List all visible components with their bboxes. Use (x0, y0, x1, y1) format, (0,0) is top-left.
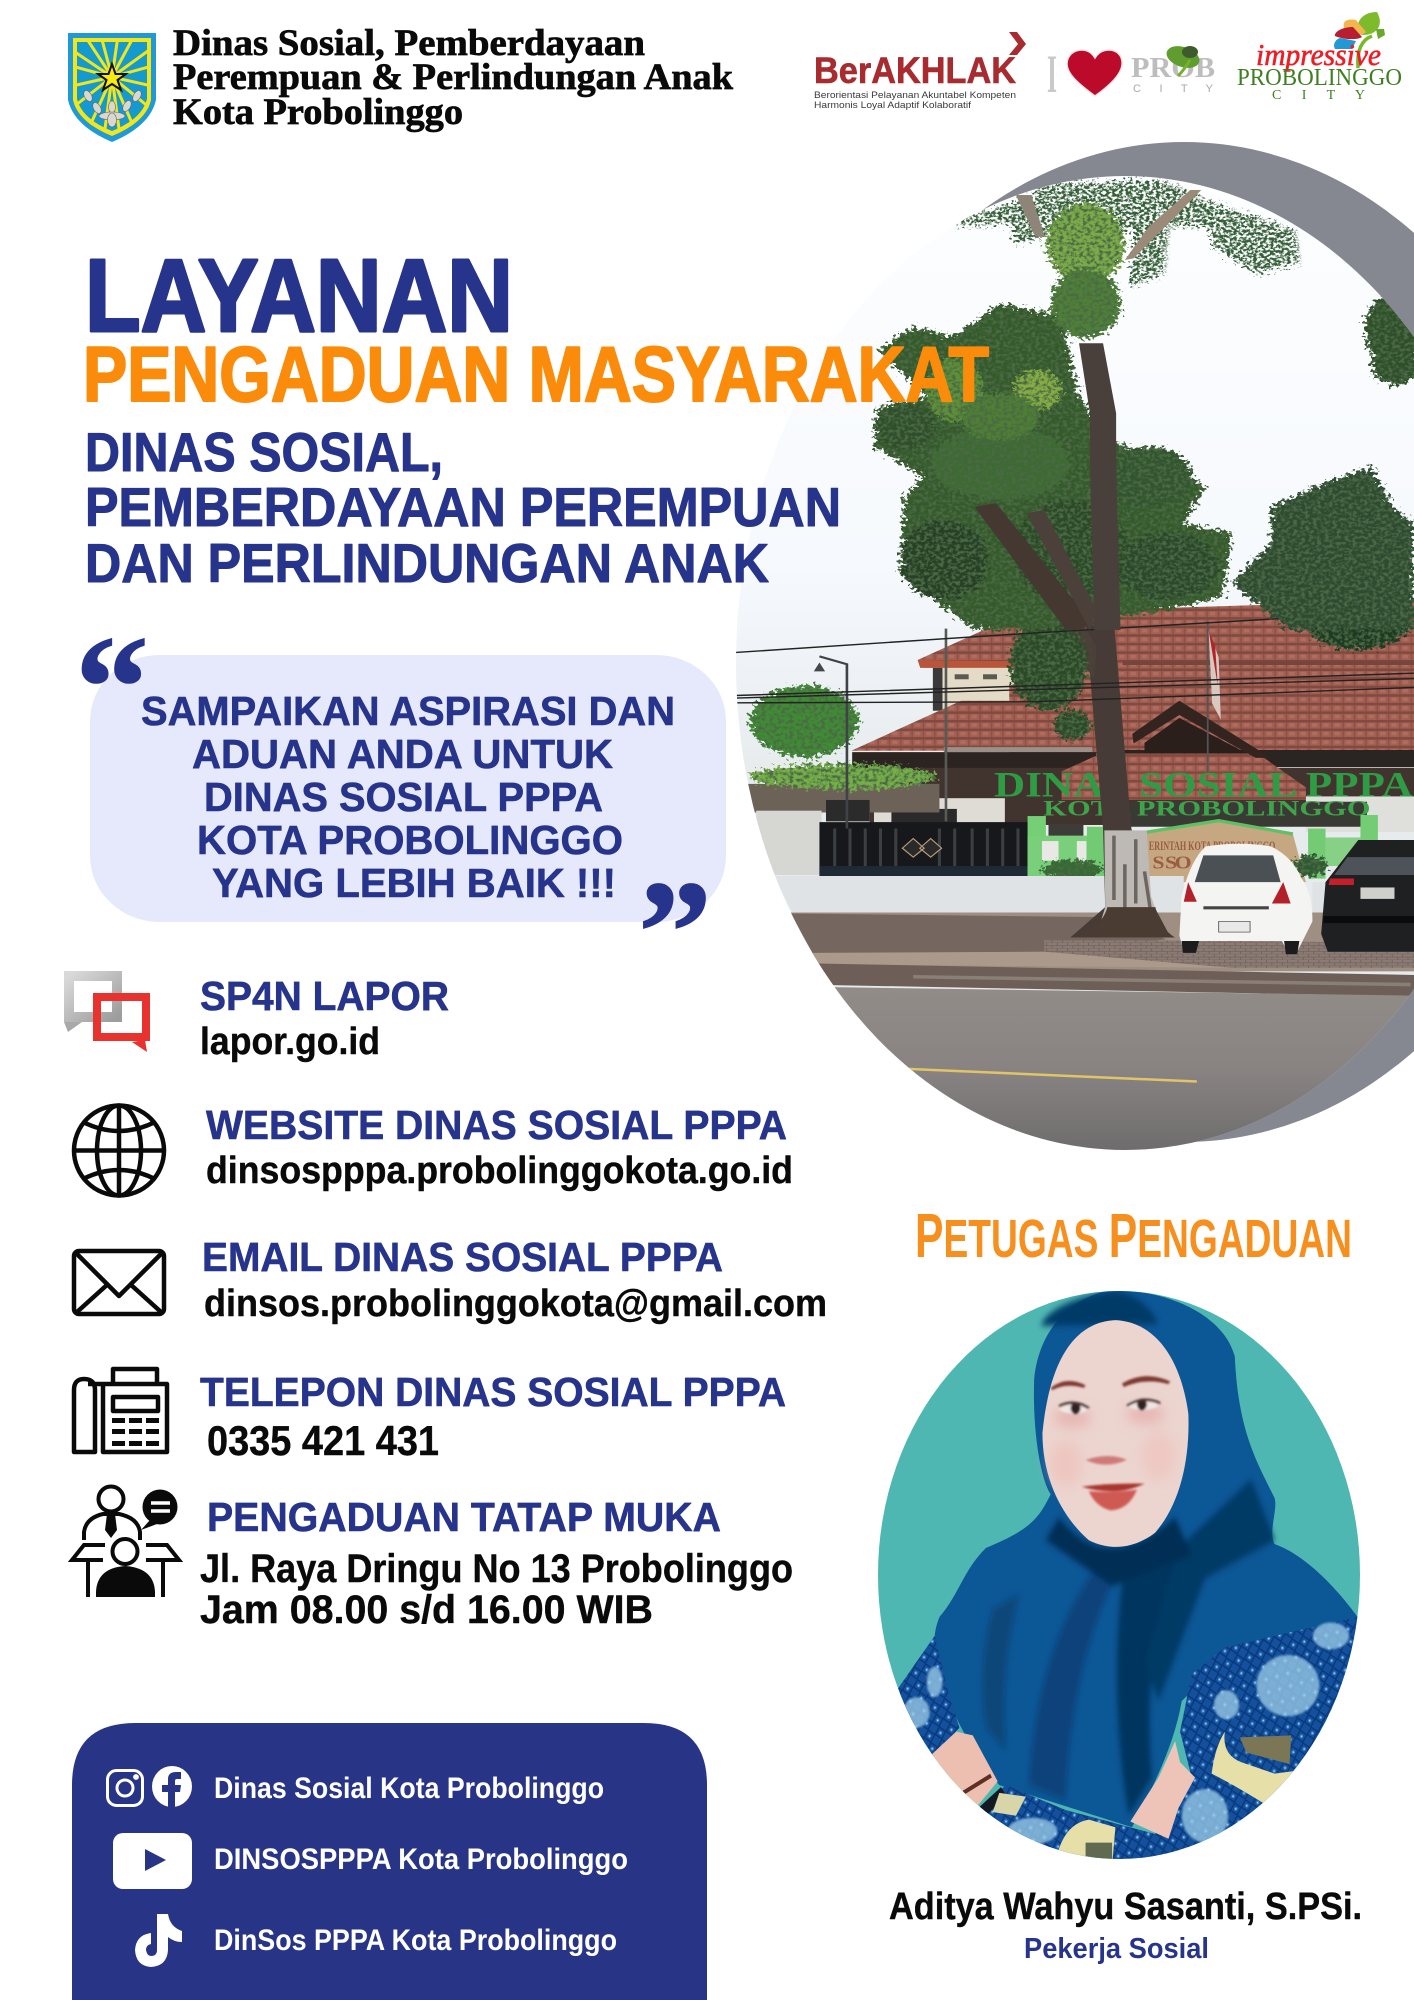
overhead wires (730, 611, 1414, 703)
vine pergola (743, 784, 939, 812)
header: agency name (173, 23, 733, 133)
building body (870, 768, 1414, 825)
logo: I love Probolinggo City (1047, 42, 1215, 104)
heading: agency name in capitals (85, 421, 841, 594)
header: agency name: Perempuan & Perlindungan Anak (173, 57, 733, 98)
photo: building and street (730, 593, 1414, 1157)
contact: SP4N Lapor: SP4N LAPOR (200, 973, 449, 1019)
logo: I love Probolinggo City: PROB (1131, 52, 1215, 84)
contact: telephone: TELEPON DINAS SOSIAL PPPA (200, 1369, 786, 1415)
subtitle: Pengaduan Masyarakat: PENGADUAN MASYARAKAT (83, 330, 989, 418)
green pillars (1028, 815, 1378, 879)
right batik sleeve (1144, 1616, 1358, 1858)
social media handles: DINSOSPPPA Kota Probolinggo (214, 1843, 628, 1876)
contact: SP4N Lapor (200, 973, 449, 1063)
pavement (730, 912, 1414, 971)
far right trees (1232, 293, 1414, 630)
logo: BerAKHLAK: BerAKHLAK (814, 50, 1016, 91)
arm and hand (932, 1732, 998, 1806)
tan name plaque (1147, 821, 1306, 882)
icon: youtube (113, 1833, 192, 1889)
tan name plaque: S SO (1152, 853, 1192, 873)
logo: BerAKHLAK: Berorientasi Pelayanan Akuntabel Kompeten (814, 90, 1016, 101)
logo: Impressive Probolinggo City: C I T Y (1272, 88, 1365, 103)
logo: Impressive Probolinggo City: impressive (1256, 37, 1381, 72)
callout: aspiration speech bubble (90, 655, 726, 922)
black fence (819, 822, 1028, 879)
callout: aspiration speech bubble: ADUAN ANDA UNTUK (192, 731, 613, 777)
upper roof (918, 602, 1414, 662)
icon: closing quotation mark: ” (638, 851, 712, 1015)
long white wall (775, 876, 1184, 888)
flag (1206, 621, 1209, 772)
contact: face to face complaints (200, 1494, 793, 1632)
icon: globe (74, 1105, 164, 1196)
panel: social media (72, 1723, 707, 2000)
white car (1179, 844, 1312, 954)
logo: BerAKHLAK: Harmonis Loyal Adaptif Kolaboratif (814, 100, 971, 111)
callout: aspiration speech bubble: SAMPAIKAN ASPIRASI DAN (141, 688, 675, 734)
decorative grey arc behind photo (784, 142, 1414, 1142)
photo: portrait of officer (870, 1285, 1370, 1881)
icon: fax telephone (74, 1369, 167, 1452)
social media handles: DinSos PPPA Kota Probolinggo (214, 1924, 617, 1957)
header: agency name: Dinas Sosial, Pemberdayaan (173, 23, 645, 64)
left roadside tree (750, 686, 859, 757)
social media handles (214, 1772, 628, 1957)
lower left roof (852, 700, 1010, 751)
street lamp (819, 656, 847, 829)
batik floral motifs (903, 1623, 1349, 1844)
officer role: Pekerja Sosial (1024, 1933, 1209, 1965)
icon: opening quotation mark: “ (75, 606, 149, 770)
icon: SP4N Lapor speech frames (64, 976, 147, 1052)
tan name plaque: ERINTAH KOTA PROBOLINGGO (1149, 839, 1275, 853)
contact: email: dinsos.probolinggokota@gmail.com (204, 1283, 827, 1325)
icon: envelope (74, 1251, 164, 1314)
contact: email (202, 1234, 827, 1325)
leaves overlapping roof (1006, 617, 1414, 744)
sign letters: DINAS SOSIAL PPPA (994, 764, 1413, 804)
tree trunk (1062, 621, 1175, 938)
dark main canopy (874, 303, 1232, 630)
icon: tiktok (135, 1914, 182, 1967)
contact: website: dinsospppa.probolinggokota.go.id (206, 1150, 793, 1192)
header: agency name: Kota Probolinggo (173, 92, 463, 133)
logo: Impressive Probolinggo City (1237, 12, 1402, 103)
icon: city shield emblem (68, 33, 156, 142)
photo: building and street: KOTA PROBOLINGGO (1043, 797, 1370, 821)
hijab (934, 1290, 1358, 1827)
curb and gravel (817, 964, 1414, 996)
thin upper foliage (957, 180, 1302, 287)
logo: Impressive Probolinggo City: PROBOLINGGO (1237, 65, 1402, 91)
contact: face to face complaints: Jam 08.00 s/d 16.00 WIB (200, 1588, 653, 1632)
photo: office building and tree (730, 170, 1414, 1160)
main title: Layanan: LAYANAN (85, 238, 513, 353)
contact: telephone: 0335 421 431 (207, 1417, 439, 1464)
yellow road line (905, 1067, 1197, 1083)
contact: face to face complaints: Jl. Raya Dringu No 13 Probolinggo (200, 1547, 793, 1591)
photo: tree canopy (874, 180, 1414, 630)
logo: BerAKHLAK (814, 32, 1026, 111)
black car (1321, 840, 1414, 952)
callout: aspiration speech bubble: YANG LEBIH BAIK !!! (212, 860, 616, 906)
contact: face to face complaints: PENGADUAN TATAP MUKA (207, 1494, 721, 1540)
logo: I love Probolinggo City: I (1047, 44, 1057, 104)
contact: telephone (200, 1369, 786, 1464)
logo: I love Probolinggo City: C I T Y (1133, 83, 1214, 95)
contact: SP4N Lapor: lapor.go.id (200, 1021, 380, 1063)
callout: aspiration speech bubble: DINAS SOSIAL PPPA (204, 774, 603, 820)
heading: agency name in capitals: DAN PERLINDUNGAN ANAK (85, 532, 769, 594)
icon: face to face meeting (72, 1486, 179, 1597)
bottom batik sleeve (980, 1786, 1176, 1859)
bright foliage (926, 358, 1062, 440)
contact: website: WEBSITE DINAS SOSIAL PPPA (206, 1102, 787, 1148)
face (1042, 1320, 1189, 1547)
contact: website (206, 1102, 793, 1192)
light green tree crown (1046, 203, 1125, 338)
icon: instagram (108, 1770, 142, 1806)
crab motif (993, 1732, 1303, 1866)
callout: aspiration speech bubble: KOTA PROBOLINGGO (197, 817, 623, 863)
road (834, 987, 1409, 1150)
heading: agency name in capitals: PEMBERDAYAAN PEREMPUAN (85, 476, 841, 538)
left batik sleeve (898, 1636, 960, 1756)
social media handles: Dinas Sosial Kota Probolinggo (214, 1772, 604, 1805)
contact: email: EMAIL DINAS SOSIAL PPPA (202, 1234, 723, 1280)
icon: facebook (152, 1766, 192, 1807)
heading: agency name in capitals: DINAS SOSIAL, (85, 421, 443, 483)
upper branches and trunk (1016, 195, 1045, 237)
officer name: Aditya Wahyu Sasanti, S.PSi. (889, 1886, 1362, 1928)
